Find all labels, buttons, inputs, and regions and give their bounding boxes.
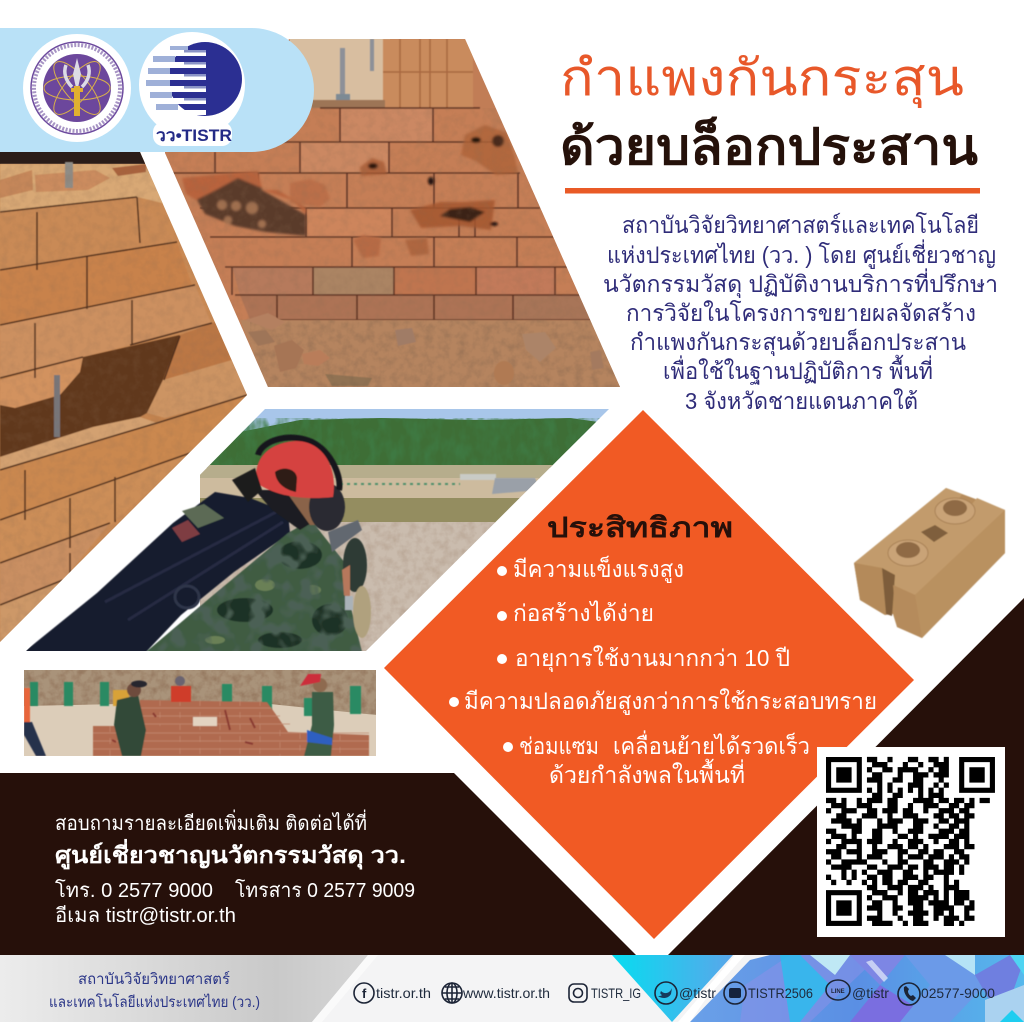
text block: contact: โทร. 0 2577 9000 — [55, 879, 213, 902]
dark background left contact — [0, 773, 636, 955]
text block: intro: สถาบันวิจัยวิทยาศาสตร์และเทคโนโลยี — [622, 212, 979, 238]
text block: contact: โทรสาร 0 2577 9009 — [235, 879, 415, 902]
logo panel — [0, 28, 314, 152]
text block: intro — [603, 212, 998, 414]
icon: TISTR logo: วว•TISTR — [156, 126, 232, 145]
icon: interlocking block — [854, 488, 1005, 638]
photo: interlocking block wall closeup — [0, 152, 260, 652]
footer organization name — [49, 971, 260, 1011]
text block: contact: สอบถามรายละเอียดเพิ่มเติม ติดต่อได้ที่ — [55, 809, 367, 835]
text block: intro: นวัตกรรมวัสดุ ปฏิบัติงานบริการที่ปรึกษา — [603, 268, 998, 298]
benefit list: ด้วยกำลังพลในพื้นที่ — [549, 759, 745, 788]
dark triangle right — [668, 598, 1024, 955]
footer organization name: สถาบันวิจัยวิทยาศาสตร์ — [78, 971, 230, 988]
benefit list: เคลื่อนย้ายได้รวดเร็ว — [613, 730, 810, 759]
social links — [354, 980, 995, 1005]
panel: orange diamond benefits: ประสิทธิภาพ — [547, 512, 733, 543]
benefit list: อายุการใช้งานมากกว่า 10 ปี — [515, 645, 790, 672]
QR code — [817, 747, 1005, 937]
head & collar — [258, 489, 310, 530]
text block: intro: 3 จังหวัดชายแดนภาคใต้ — [685, 388, 918, 414]
benefit list: ก่อสร้างได้ง่าย — [513, 600, 654, 626]
social links: 02577-9000 — [921, 985, 995, 1001]
benefit list — [449, 554, 877, 788]
text block: intro: เพื่อใช้ในฐานปฏิบัติการ พื้นที่ — [663, 355, 933, 385]
icon: TISTR logo — [139, 32, 245, 146]
social links: TISTR_IG — [591, 985, 641, 1001]
social links: www.tistr.or.th — [462, 985, 550, 1001]
benefit list: มีความแข็งแรงสูง — [513, 554, 684, 583]
footer organization name: และเทคโนโลยีแห่งประเทศไทย (วว.) — [49, 993, 260, 1011]
social links: TISTR2506 — [748, 985, 813, 1001]
title — [560, 50, 978, 175]
benefit list: ช่อมแซม — [519, 733, 599, 759]
social links: @tistr — [679, 985, 716, 1001]
social links: f — [362, 986, 367, 1001]
social links: LINE — [831, 989, 845, 995]
footer band — [0, 955, 1024, 1022]
panel: orange diamond benefits — [384, 410, 914, 939]
camouflage uniform — [146, 520, 362, 652]
social links: tistr.or.th — [376, 985, 431, 1001]
photo: damaged brick wall — [160, 39, 640, 390]
social links: @tistr — [852, 985, 889, 1001]
pattern: blue diamonds — [612, 955, 1024, 1022]
photo: test wall with soldiers — [24, 670, 376, 756]
icon: ministry seal — [23, 34, 131, 142]
text block: contact: ศูนย์เชี่ยวชาญนวัตกรรมวัสดุ วว. — [55, 838, 406, 870]
photo: soldier firing at range — [20, 409, 620, 655]
text block: intro: แห่งประเทศไทย (วว. ) โดย ศูนย์เชี่ยวชาญ — [607, 239, 996, 269]
text block: intro: การวิจัยในโครงการขยายผลจัดสร้าง — [626, 300, 976, 326]
text block: contact — [55, 809, 415, 927]
backpack — [24, 492, 290, 652]
title: กำแพงกันกระสุน — [560, 50, 964, 108]
text block: intro: กำแพงกันกระสุนด้วยบล็อกประสาน — [630, 327, 966, 356]
text block: contact: อีเมล tistr@tistr.or.th — [55, 905, 236, 927]
benefit list: มีความปลอดภัยสูงกว่าการใช้กระสอบทราย — [464, 688, 877, 715]
title: ด้วยบล็อกประสาน — [560, 116, 978, 175]
